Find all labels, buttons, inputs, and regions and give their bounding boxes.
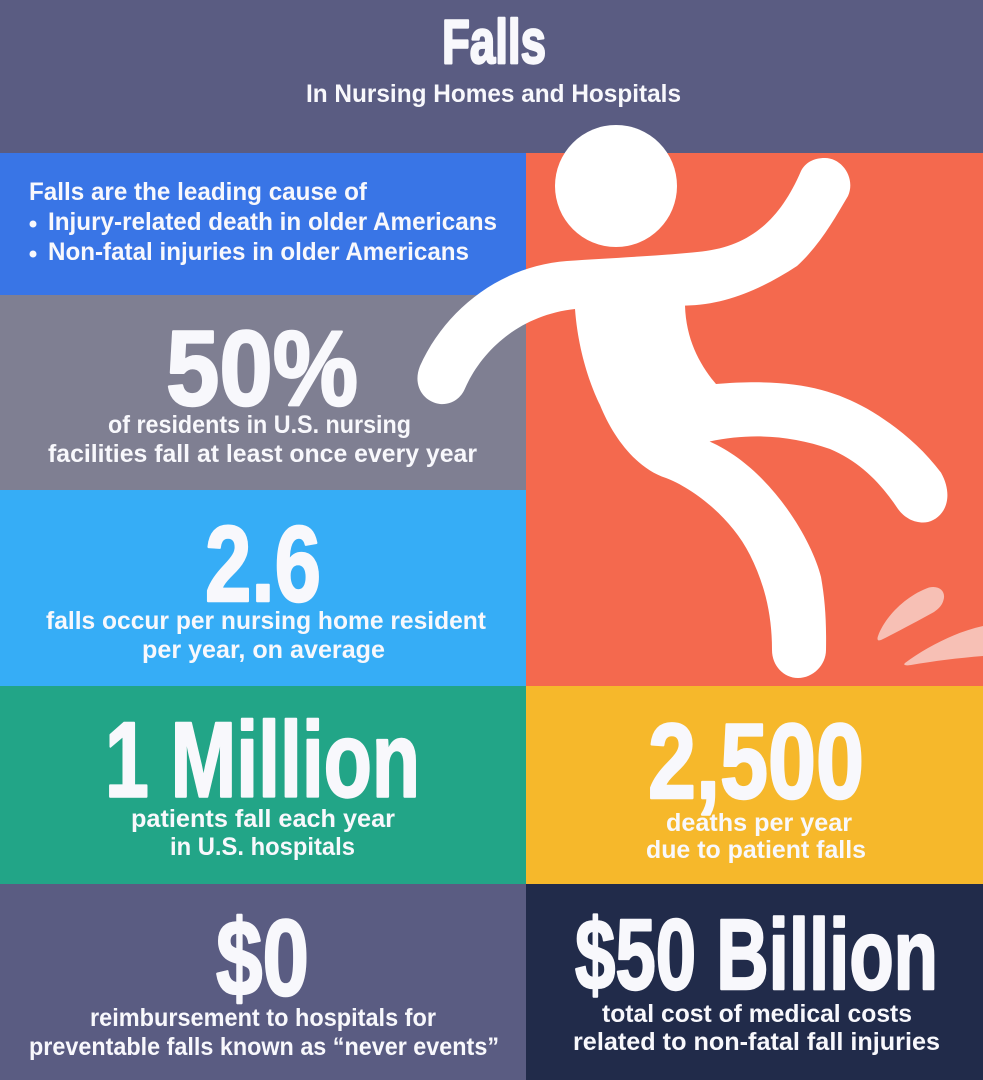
stat description: of residents in U.S. nursing xyxy=(108,411,411,439)
stat description xyxy=(573,1000,940,1056)
stat: 1 Million: 1 Million xyxy=(105,700,420,820)
panel: 2,500 deaths xyxy=(526,686,983,884)
stat description: related to non-fatal fall injuries xyxy=(573,1028,940,1056)
stat description: falls occur per nursing home resident xyxy=(46,607,487,635)
stat description: in U.S. hospitals xyxy=(170,833,355,861)
stat description: total cost of medical costs xyxy=(602,1000,912,1028)
stat description: deaths per year xyxy=(666,809,852,837)
bullet list xyxy=(30,208,497,266)
stat description: reimbursement to hospitals for xyxy=(90,1004,436,1032)
stat description xyxy=(46,607,487,664)
stat description: due to patient falls xyxy=(646,836,866,864)
bullet list: Injury-related death in older Americans xyxy=(48,208,497,236)
panel: leading cause xyxy=(0,153,526,295)
panel: 50 percent xyxy=(0,295,526,490)
stat: $0: $0 xyxy=(216,897,309,1018)
title: Falls xyxy=(442,8,546,77)
intro text: Falls are the leading cause of xyxy=(29,178,368,206)
icon: splash marks xyxy=(877,587,983,665)
stat: 50%: 50% xyxy=(166,308,358,428)
stat description xyxy=(48,411,477,468)
stat description: per year, on average xyxy=(142,636,385,664)
panel: $0 reimbursement xyxy=(0,884,526,1080)
stat description: preventable falls known as “never events” xyxy=(29,1033,499,1061)
panel: header xyxy=(0,0,983,153)
stat: 2.6: 2.6 xyxy=(205,503,321,624)
panel: figure background xyxy=(526,153,983,686)
panel: 1 million xyxy=(0,686,526,884)
stat description xyxy=(29,1004,499,1061)
panel: $50 billion xyxy=(526,884,983,1080)
bullet list: Non-fatal injuries in older Americans xyxy=(48,238,469,266)
stat description xyxy=(131,805,395,861)
subtitle: In Nursing Homes and Hospitals xyxy=(306,80,681,108)
stat description: facilities fall at least once every year xyxy=(48,440,477,468)
stat: 2,500: 2,500 xyxy=(648,701,864,821)
icon: falling person xyxy=(417,125,947,678)
stat description xyxy=(646,809,866,864)
panel: 2.6 falls xyxy=(0,490,526,686)
stat description: patients fall each year xyxy=(131,805,395,833)
